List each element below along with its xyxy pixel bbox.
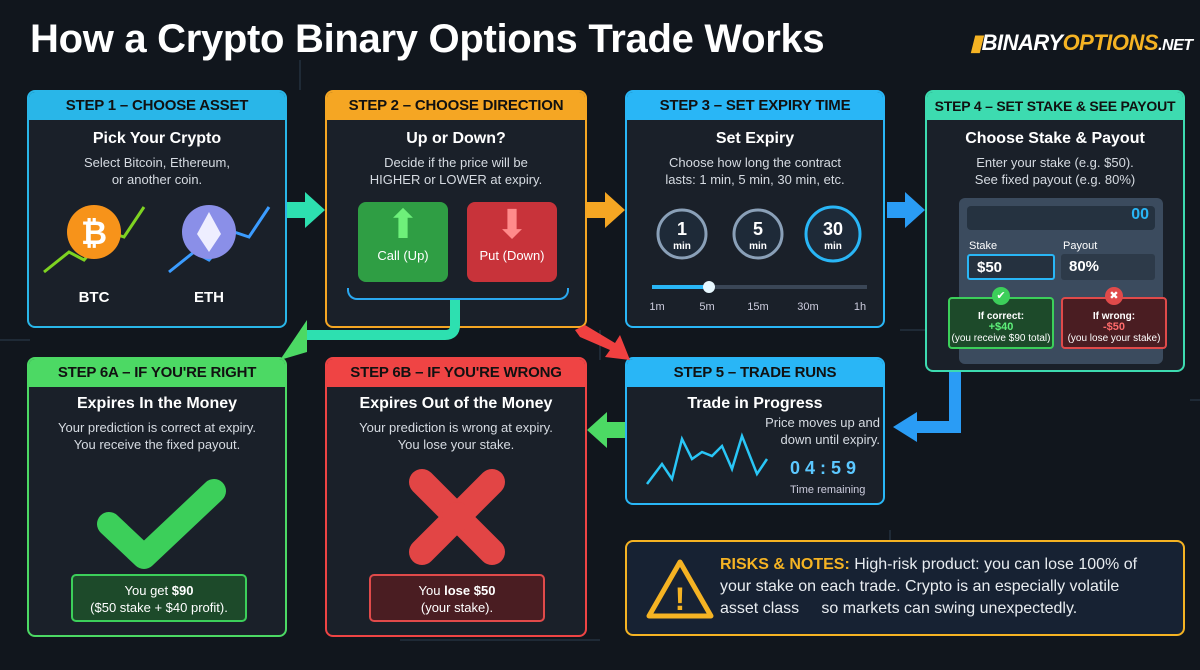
step 1 header <box>29 92 285 120</box>
callout: risks & notes: asset class so markets can swing unexpectedly. <box>720 600 1077 617</box>
panel: step 6B: Expires Out of the Money <box>360 395 552 412</box>
result box: ($50 stake + $40 profit). <box>90 600 228 615</box>
result box <box>369 574 545 622</box>
panel: step 4: Choose Stake & Payout <box>965 130 1145 147</box>
result box: (your stake). <box>421 600 493 615</box>
panel: step 1: or another coin. <box>112 172 202 187</box>
panel: step 1: Pick Your Crypto <box>93 130 221 147</box>
price chart <box>646 432 768 485</box>
panel: step 4: (you lose your stake) <box>1068 333 1160 344</box>
arrow 4 to 5 <box>893 372 961 442</box>
stake calculator: 80% <box>1069 258 1099 275</box>
icon: BTC and ETH coins: ₿ <box>81 215 107 251</box>
panel: step 4: ✔ <box>996 290 1006 302</box>
panel: step 3: Choose how long the contract <box>669 155 841 170</box>
step 3 header: STEP 3 – SET EXPIRY TIME <box>660 97 850 114</box>
step 2 header: STEP 2 – CHOOSE DIRECTION <box>349 97 563 114</box>
panel: step 6A <box>27 357 287 637</box>
arrow 2 to 6A <box>282 300 460 359</box>
panel: step 6A: Your prediction is correct at expiry. <box>58 420 256 435</box>
panel: step 4: Enter your stake (e.g. $50). <box>976 155 1134 170</box>
step 4 header <box>927 92 1183 120</box>
icon: X <box>409 469 505 565</box>
call button: ⬆ <box>386 203 420 247</box>
timers and slider: 30m <box>797 301 819 313</box>
panel: step 4: ✖ <box>1109 290 1119 302</box>
panel: step 2: Decide if the price will be <box>384 155 528 170</box>
step 2 header <box>327 92 585 120</box>
arrow 5 to 6B <box>587 412 625 448</box>
arrow 2 to 6B red <box>575 325 630 360</box>
step 6B header <box>327 359 585 387</box>
panel: step 5: Trade in Progress <box>687 395 823 412</box>
panel: step 2 <box>325 90 587 328</box>
panel: step 6A: You receive the fixed payout. <box>74 437 240 452</box>
timers and slider: 1m <box>649 301 665 313</box>
icon: warning <box>646 560 714 618</box>
timers and slider: 1 <box>677 219 687 239</box>
timers and slider: 5 <box>753 219 763 239</box>
icon: BTC and ETH coins: ETH <box>194 289 224 306</box>
stake calculator: $50 <box>977 259 1002 276</box>
timers and slider <box>649 206 867 313</box>
step 6A header <box>29 359 285 387</box>
outcome boxes: If correct: <box>978 311 1024 322</box>
panel: step 3: lasts: 1 min, 5 min, 30 min, etc. <box>665 172 845 187</box>
timers and slider: 15m <box>747 301 769 313</box>
panel: step 1 <box>27 90 287 328</box>
timers and slider: 1h <box>854 301 866 313</box>
step 1 header: STEP 1 – CHOOSE ASSET <box>66 97 248 114</box>
icon: warning: ! <box>675 581 685 617</box>
panel: step 3: Set Expiry <box>716 130 794 147</box>
put button <box>467 202 557 282</box>
panel: step 3 <box>625 90 885 328</box>
stake calculator: Stake <box>969 240 997 252</box>
panel: step 4: See fixed payout (e.g. 80%) <box>975 172 1135 187</box>
panel: step 2: Up or Down? <box>406 130 506 147</box>
timers and slider: min <box>824 241 842 252</box>
title: How a Crypto Binary Options Trade Works <box>30 17 824 61</box>
stake calculator <box>959 198 1163 364</box>
panel: step 6B <box>325 357 587 637</box>
timers and slider: min <box>749 241 767 252</box>
arrow 3 to 4 <box>887 192 925 228</box>
timers and slider: min <box>673 241 691 252</box>
callout: risks & notes: your stake on each trade. Crypto is an especially volatile <box>720 578 1119 595</box>
countdown timer: 04:59 <box>790 458 861 478</box>
timers and slider: 5m <box>699 301 715 313</box>
panel: step 6A: Expires In the Money <box>77 395 237 412</box>
panel: step 5 <box>625 357 885 505</box>
icon: BTC and ETH coins: BTC <box>79 289 110 306</box>
panel: step 6B: You lose your stake. <box>398 437 514 452</box>
put button: Put (Down) <box>479 248 545 263</box>
panel: step 5: Time remaining <box>790 484 865 496</box>
icon: checkmark <box>97 479 226 569</box>
panel: step 4: If wrong: <box>1093 311 1135 322</box>
call button <box>358 202 448 282</box>
outcome boxes <box>948 297 1054 349</box>
step 6A header: STEP 6A – IF YOU'RE RIGHT <box>58 364 256 381</box>
callout: risks & notes <box>625 540 1185 636</box>
step 4 header: STEP 4 – SET STAKE & SEE PAYOUT <box>935 98 1175 114</box>
outcome boxes: +$40 <box>989 321 1013 333</box>
panel: step 5: Price moves up and down until expiry. <box>765 415 880 447</box>
call button: Call (Up) <box>377 248 429 263</box>
stake calculator: Payout <box>1063 240 1097 252</box>
panel: step 6B: Your prediction is wrong at expiry. <box>359 420 553 435</box>
panel: step 1: Select Bitcoin, Ethereum, <box>84 155 230 170</box>
step 5 header <box>627 359 883 387</box>
logo: ▮BINARYOPTIONS.NET <box>970 30 1193 55</box>
callout: risks & notes: RISKS & NOTES: High-risk product: you can lose 100% of <box>720 556 1137 573</box>
arrow 1 to 2 <box>287 192 325 228</box>
step 3 header <box>627 92 883 120</box>
step 6B header: STEP 6B – IF YOU'RE WRONG <box>350 364 562 381</box>
timers and slider: 30 <box>823 219 843 239</box>
outcome boxes: (you receive $90 total) <box>952 333 1050 344</box>
stake calculator: 00 <box>1131 206 1149 223</box>
put button: ⬇ <box>495 203 529 247</box>
result box: You lose $50 <box>419 583 495 598</box>
step 5 header: STEP 5 – TRADE RUNS <box>674 364 836 381</box>
panel: step 4: -$50 <box>1103 321 1125 333</box>
arrow 2 to 3 <box>587 192 625 228</box>
result box: You get $90 <box>125 583 193 598</box>
panel: step 2: HIGHER or LOWER at expiry. <box>370 172 542 187</box>
icon: BTC and ETH coins <box>43 205 270 306</box>
result box <box>71 574 247 622</box>
panel: step 4 <box>925 90 1185 372</box>
